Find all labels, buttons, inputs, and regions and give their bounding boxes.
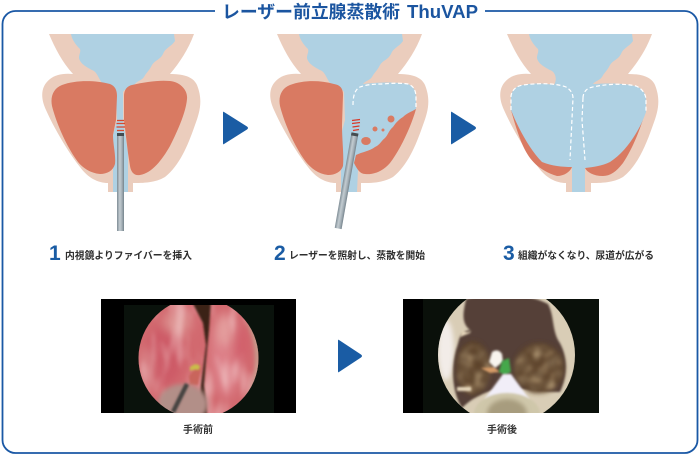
title: ThuVAP [407, 2, 478, 22]
step 3 caption: 3 [503, 242, 515, 265]
arrow 3 [338, 340, 362, 372]
brown tissue area [456, 341, 564, 395]
dark tissue mottling [457, 345, 563, 393]
endoscope fibre [117, 133, 124, 231]
photo: after surgery [403, 299, 599, 413]
tissue outline [500, 34, 658, 192]
dashed cavity outline [353, 83, 416, 109]
step 2 caption: 2 [274, 242, 286, 265]
left tissue crescent [511, 110, 572, 176]
scope tip [156, 382, 210, 413]
tissue streaks [140, 305, 258, 413]
label: before surgery: 手術前 [183, 423, 213, 436]
laser coils [116, 120, 125, 130]
step 3 caption: 組織がなくなり、尿道が広がる [518, 249, 654, 262]
title: レーザー前立腺蒸散術 [222, 1, 400, 22]
arrow 2 [451, 112, 476, 144]
step 1 caption: 1 [49, 242, 61, 265]
left lobe shading [139, 310, 192, 392]
right tissue crescent [585, 112, 645, 176]
step 1 caption [49, 242, 192, 265]
step 3 caption [503, 242, 654, 265]
panel: step 1 diagram [42, 34, 200, 231]
dark cavity [453, 294, 566, 408]
panel: step 2 diagram [270, 34, 428, 229]
tissue outline [42, 34, 200, 192]
left prostate lobe [279, 81, 343, 175]
fibre tip [189, 367, 201, 385]
bladder, urethra and open cavity [511, 34, 646, 192]
green laser reflection [499, 358, 511, 375]
pale rim highlight [438, 320, 454, 380]
step 1 caption: 内視鏡よりファイバーを挿入 [65, 249, 192, 262]
dashed cavity outlines [511, 84, 646, 160]
photo: before surgery [101, 299, 296, 413]
scope tip [475, 392, 539, 413]
pale right rim [246, 322, 258, 392]
light tissue mottling [457, 345, 563, 393]
left prostate lobe [51, 81, 117, 174]
step 2 caption [274, 242, 425, 265]
white debris [489, 350, 503, 368]
title [215, 1, 485, 22]
right prostate lobe [124, 81, 187, 175]
step 2 caption: レーザーを照射し、蒸散を開始 [289, 249, 425, 262]
vaporised tissue bubbles [361, 116, 394, 145]
right lobe shading [210, 313, 247, 397]
arrow 1 [223, 112, 248, 144]
angled endoscope fibre [335, 132, 358, 229]
tissue highlights [457, 328, 500, 391]
label: after surgery: 手術後 [487, 423, 517, 436]
light cone [484, 374, 530, 400]
remaining right lobe [354, 109, 416, 174]
tissue outline [270, 34, 428, 192]
panel: step 3 diagram [500, 34, 658, 192]
bladder and urethra [71, 34, 175, 192]
central urethral slit [191, 300, 211, 415]
laser coils [352, 120, 360, 130]
bladder, urethra and vaporised cavity [299, 34, 416, 192]
